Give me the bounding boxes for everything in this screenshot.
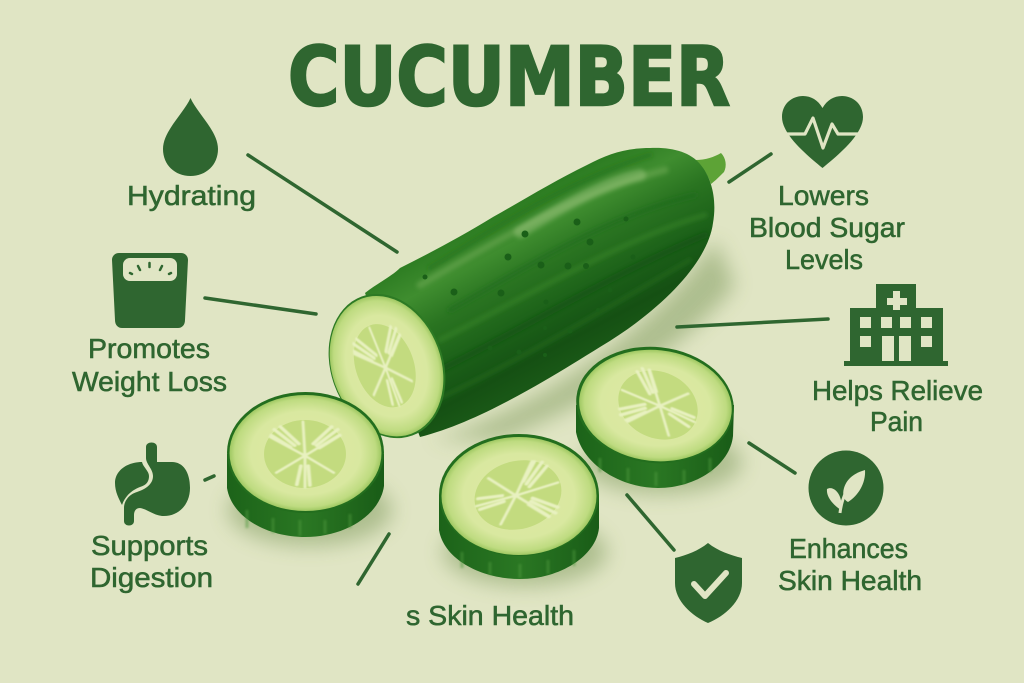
icon: heart with pulse xyxy=(782,96,863,168)
label: enhances skin health xyxy=(778,533,922,596)
label: helps relieve pain xyxy=(812,375,983,437)
icon: stomach xyxy=(115,442,190,526)
icon: hospital xyxy=(844,284,948,366)
slice middle xyxy=(439,434,599,579)
slice left xyxy=(227,392,384,537)
label: promotes weight loss: Weight Loss xyxy=(72,366,227,397)
label: lowers blood sugar levels: Lowers xyxy=(778,180,869,211)
label: supports digestion: Digestion xyxy=(90,562,213,593)
icon: water drop xyxy=(163,98,218,176)
label: hydrating: Hydrating xyxy=(127,180,256,211)
slice right xyxy=(570,339,740,488)
label: helps relieve pain: Pain xyxy=(870,406,923,437)
icon: shield check xyxy=(675,543,742,623)
cast shadows xyxy=(228,240,742,586)
label: skin health: s Skin Health xyxy=(406,600,574,631)
label: lowers blood sugar levels xyxy=(749,180,905,275)
cucumber illustration xyxy=(328,148,726,438)
connector lines xyxy=(205,154,828,584)
title: CUCUMBER xyxy=(288,31,730,125)
icon: leaf circle xyxy=(808,450,884,526)
label: enhances skin health: Enhances xyxy=(789,533,908,564)
label: promotes weight loss xyxy=(72,333,227,397)
label: promotes weight loss: Promotes xyxy=(88,333,210,364)
label: supports digestion xyxy=(90,530,213,593)
label: lowers blood sugar levels: Blood Sugar xyxy=(749,212,905,243)
cucumber bumps xyxy=(422,216,636,382)
label: enhances skin health: Skin Health xyxy=(778,565,922,596)
icon: weighing scale xyxy=(112,253,188,328)
label: supports digestion: Supports xyxy=(91,530,208,561)
cucumber stem xyxy=(695,153,726,184)
cut face xyxy=(309,277,465,455)
label: lowers blood sugar levels: Levels xyxy=(785,244,863,275)
label: helps relieve pain: Helps Relieve xyxy=(812,375,983,406)
cucumber body xyxy=(365,148,714,437)
